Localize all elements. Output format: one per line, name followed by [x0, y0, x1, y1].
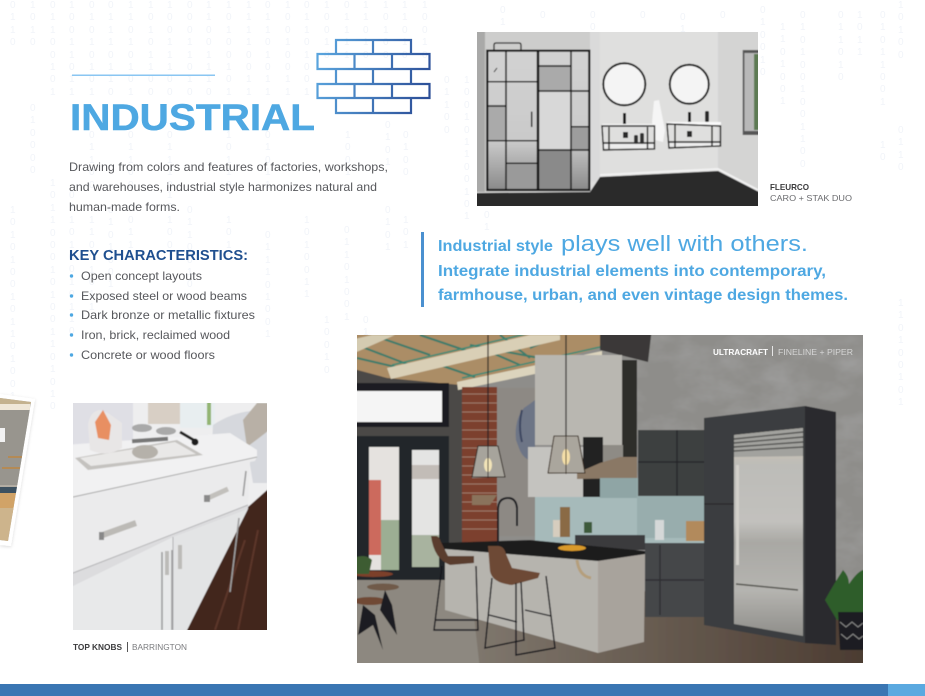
callout: plays well with others: Industrial style	[438, 238, 553, 255]
text: 10010	[324, 315, 330, 376]
text: 1001	[345, 130, 351, 178]
intro text: Drawing from colors and features of factories, workshops,	[69, 160, 388, 174]
text: 01011	[265, 130, 271, 191]
footer bar	[0, 684, 925, 696]
text: 1010	[226, 215, 232, 263]
text: 0	[640, 10, 646, 21]
text: 011010010110	[69, 190, 75, 337]
text: 01101001	[304, 0, 310, 98]
text: 01	[484, 210, 490, 233]
caption: Fleurco	[770, 183, 852, 203]
text: 0101	[385, 205, 391, 253]
text: 10101100	[148, 0, 154, 98]
text: 01010101	[89, 0, 95, 98]
text: 00	[590, 10, 596, 33]
text: 1011	[857, 10, 863, 58]
text: 11001110	[206, 0, 212, 98]
text: 011101001	[265, 230, 271, 340]
text: 10100	[898, 0, 904, 61]
text: 10101001011010010	[10, 205, 16, 414]
photo: bathroom with black grid shower	[477, 32, 758, 206]
text: 11110011	[246, 0, 252, 98]
text: 01110110	[108, 0, 114, 98]
text: 01100101	[50, 0, 56, 98]
text: 0101001001100	[800, 10, 806, 170]
photo: white cabinet with silver pulls	[73, 403, 267, 630]
callout: plays well with others	[421, 231, 848, 307]
bullet list	[70, 269, 255, 362]
text: 110100101	[898, 298, 904, 408]
caption: Ultracraft: FINELINE + PIPER	[778, 348, 853, 357]
callout: plays well with others: Integrate industrial elements into contemporary,	[438, 263, 826, 280]
text: 00011010	[187, 0, 193, 98]
caption: Fleurco: CARO + STAK DUO	[770, 193, 852, 203]
text: 0	[540, 10, 546, 21]
text: 1010	[30, 0, 36, 48]
text: 01	[500, 5, 506, 28]
text: 10100	[383, 0, 389, 61]
intro text: human-made forms.	[69, 200, 180, 214]
intro text: and warehouses, industrial style harmonizes natural and	[69, 180, 377, 194]
caption: Ultracraft: ULTRACRAFT	[713, 348, 768, 357]
text: 10100	[167, 190, 173, 251]
icon: brick wall	[318, 40, 430, 113]
text: 01010010	[108, 205, 114, 303]
bullet list: Iron, brick, reclaimed wood	[81, 328, 230, 342]
bullet list: Dark bronze or metallic fixtures	[81, 308, 255, 322]
text: 0110	[10, 0, 16, 48]
intro text	[69, 160, 388, 214]
text: 0110	[128, 215, 134, 263]
text: 0110	[363, 315, 369, 363]
text: 01101011	[265, 0, 271, 98]
text: 100101100101	[464, 75, 470, 222]
text: 11001011	[89, 215, 95, 313]
callout: plays well with others: plays well with others.	[561, 231, 808, 256]
text: 1010011	[304, 215, 310, 300]
text: 1101001	[780, 22, 786, 107]
text: 10100101	[226, 0, 232, 98]
text: 01111	[344, 0, 350, 61]
caption: Fleurco: FLEURCO	[770, 183, 810, 192]
caption: Top Knobs: TOP KNOBS	[73, 643, 123, 652]
text: 011010	[838, 10, 844, 83]
caption: Top Knobs	[73, 642, 187, 652]
bullet list: Open concept layouts	[81, 269, 202, 283]
text: 01100	[128, 130, 134, 191]
text: 10010	[324, 0, 330, 61]
text: 10011100	[167, 0, 173, 98]
text: 0110010	[187, 205, 193, 290]
text: 0101	[385, 120, 391, 168]
text: 11010	[363, 0, 369, 61]
heading: key characteristics: KEY CHARACTERISTICS:	[69, 248, 248, 264]
title rule	[72, 74, 215, 76]
text: 0110	[898, 125, 904, 173]
text: 1011000101001101010	[50, 178, 56, 412]
caption: Ultracraft	[713, 346, 853, 357]
text: 01110	[167, 130, 173, 191]
bullet list: Exposed steel or wood beams	[81, 289, 247, 303]
text: 01100	[444, 75, 450, 136]
text: 101	[403, 215, 409, 251]
text: 0	[720, 10, 726, 21]
text: 11010101	[128, 0, 134, 98]
text: 01100	[89, 130, 95, 191]
text: 0100	[403, 130, 409, 178]
text: 10010011	[285, 0, 291, 98]
text: 10011011	[69, 0, 75, 98]
caption: Top Knobs: BARRINGTON	[132, 642, 187, 652]
text: 010000	[30, 103, 36, 176]
text: 11010	[402, 0, 408, 61]
bullet list: Concrete or wood floors	[81, 348, 215, 362]
text: 010010	[760, 5, 766, 78]
text: 10	[880, 140, 886, 163]
text: 01	[680, 12, 686, 35]
title: INDUSTRIAL	[70, 96, 315, 138]
callout: plays well with others: farmhouse, urban, and even vintage design themes.	[438, 287, 848, 304]
text: 10010	[422, 0, 428, 61]
photo: framed room cropped at edge	[0, 394, 35, 546]
text: 10110	[226, 130, 232, 191]
text: 01011001	[880, 10, 886, 108]
text: 01101001	[344, 225, 350, 323]
photo: industrial kitchen	[350, 328, 870, 670]
